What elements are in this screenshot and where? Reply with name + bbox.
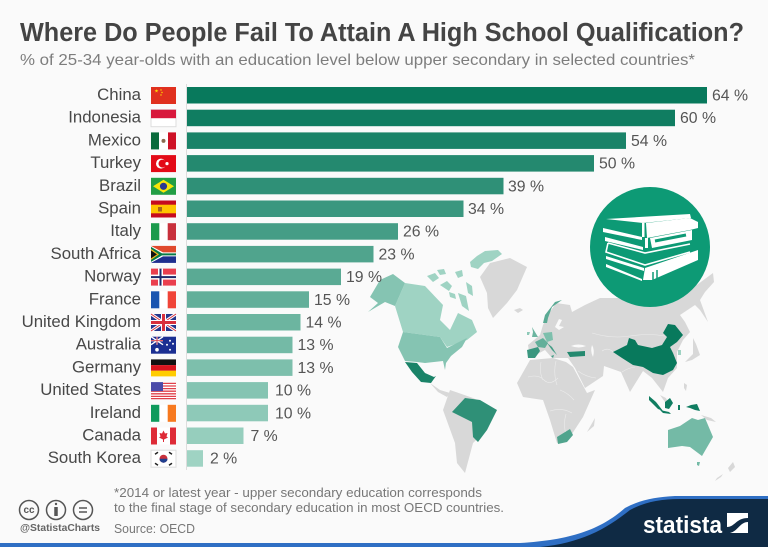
row: Norway <box>84 267 382 286</box>
book 3 <box>606 243 690 265</box>
map: inland seas and borders <box>528 319 665 435</box>
row: South Korea <box>48 448 237 468</box>
row: Italy <box>110 221 439 241</box>
row: Germany: 13 % <box>298 360 334 377</box>
row: United States: 10 % <box>275 383 311 400</box>
row: Mexico <box>88 130 667 150</box>
book 1 <box>603 214 698 240</box>
row: Italy: 26 % <box>403 224 439 241</box>
row: France: 15 % <box>314 292 350 309</box>
row: China <box>97 85 748 104</box>
row: Canada: Canada <box>82 426 142 444</box>
map: Alaska <box>368 274 405 312</box>
map: Brazil <box>452 398 497 442</box>
row: Indonesia <box>68 108 716 127</box>
row: United States <box>40 380 311 400</box>
map: Norway <box>543 300 562 323</box>
map: grey land <box>430 258 735 481</box>
row: Ireland: Ireland <box>90 403 141 422</box>
book 2 <box>605 230 692 250</box>
source: Source: OECD <box>114 522 195 536</box>
statista footer band <box>0 496 768 547</box>
row: Norway: Norway <box>84 267 142 286</box>
footnote <box>114 486 504 536</box>
map: United States <box>398 332 467 370</box>
row: Indonesia: 60 % <box>680 110 716 127</box>
row: South Africa: 23 % <box>378 246 415 263</box>
map: United Kingdom <box>532 327 538 337</box>
row: South Korea: 2 % <box>210 451 237 468</box>
handle: @StatistaCharts <box>20 523 100 534</box>
map: Ireland <box>527 332 530 335</box>
row: Germany: Germany <box>72 357 142 376</box>
row: Turkey: 50 % <box>599 156 635 173</box>
book 4 <box>606 250 698 281</box>
row: Brazil <box>99 176 544 195</box>
row: Spain <box>98 198 504 218</box>
map: Turkey <box>567 351 585 357</box>
row: Germany <box>72 357 334 377</box>
row: Turkey: Turkey <box>90 153 142 172</box>
row: France <box>89 289 350 309</box>
row: United Kingdom: 14 % <box>306 314 342 332</box>
row: Australia: Australia <box>76 335 142 354</box>
row: Spain: 34 % <box>468 201 504 218</box>
statista logo: statista <box>643 512 723 539</box>
map: Canada and arctic islands <box>395 250 502 347</box>
row: South Africa <box>50 244 415 263</box>
row: Ireland <box>90 403 311 422</box>
row: South Africa: South Africa <box>50 244 142 263</box>
row: Norway: 19 % <box>346 269 382 286</box>
row: Mexico: 54 % <box>631 133 667 150</box>
row: Brazil: Brazil <box>99 176 141 195</box>
icon: books in circle <box>590 187 710 307</box>
row: Turkey <box>90 153 635 173</box>
map: Spain <box>527 347 540 358</box>
footnote: to the final stage of secondary education in most OECD countries. <box>114 501 504 515</box>
row: United Kingdom: United Kingdom <box>22 312 141 331</box>
row: United Kingdom <box>22 312 342 332</box>
row: Brazil: 39 % <box>508 178 544 195</box>
row: China: China <box>97 85 142 104</box>
map: Mexico <box>405 362 436 383</box>
row: Canada: 7 % <box>250 428 278 445</box>
row: Australia <box>76 335 334 354</box>
bar chart <box>22 85 748 468</box>
row: China: 64 % <box>712 88 748 104</box>
world map <box>368 250 735 481</box>
map: Germany <box>543 332 553 342</box>
creative commons icons <box>20 500 92 520</box>
subtitle: % of 25-34 year-olds with an education level below upper secondary in selected countries* <box>20 52 695 69</box>
row: Italy: Italy <box>110 221 142 240</box>
map: Australia <box>668 418 713 466</box>
row: Canada <box>82 426 278 445</box>
map: South Africa <box>557 429 573 444</box>
row: United States: United States <box>40 380 141 399</box>
map: France <box>535 338 548 348</box>
map: South Korea <box>678 350 681 355</box>
map: Indonesia <box>649 396 700 414</box>
title: Where Do People Fail To Attain A High School Qualification? <box>20 19 744 47</box>
creative commons icons: cc <box>23 505 35 516</box>
footnote: *2014 or latest year - upper secondary education corresponds <box>114 486 482 500</box>
map: China <box>613 324 683 375</box>
row: Ireland: 10 % <box>275 405 311 422</box>
row: Australia: 13 % <box>298 337 334 354</box>
row: Spain: Spain <box>98 198 141 218</box>
row: Mexico: Mexico <box>88 130 141 149</box>
row: Indonesia: Indonesia <box>68 108 142 127</box>
row: South Korea: South Korea <box>48 448 142 467</box>
row: France: France <box>89 289 141 308</box>
map: Italy <box>547 343 557 358</box>
